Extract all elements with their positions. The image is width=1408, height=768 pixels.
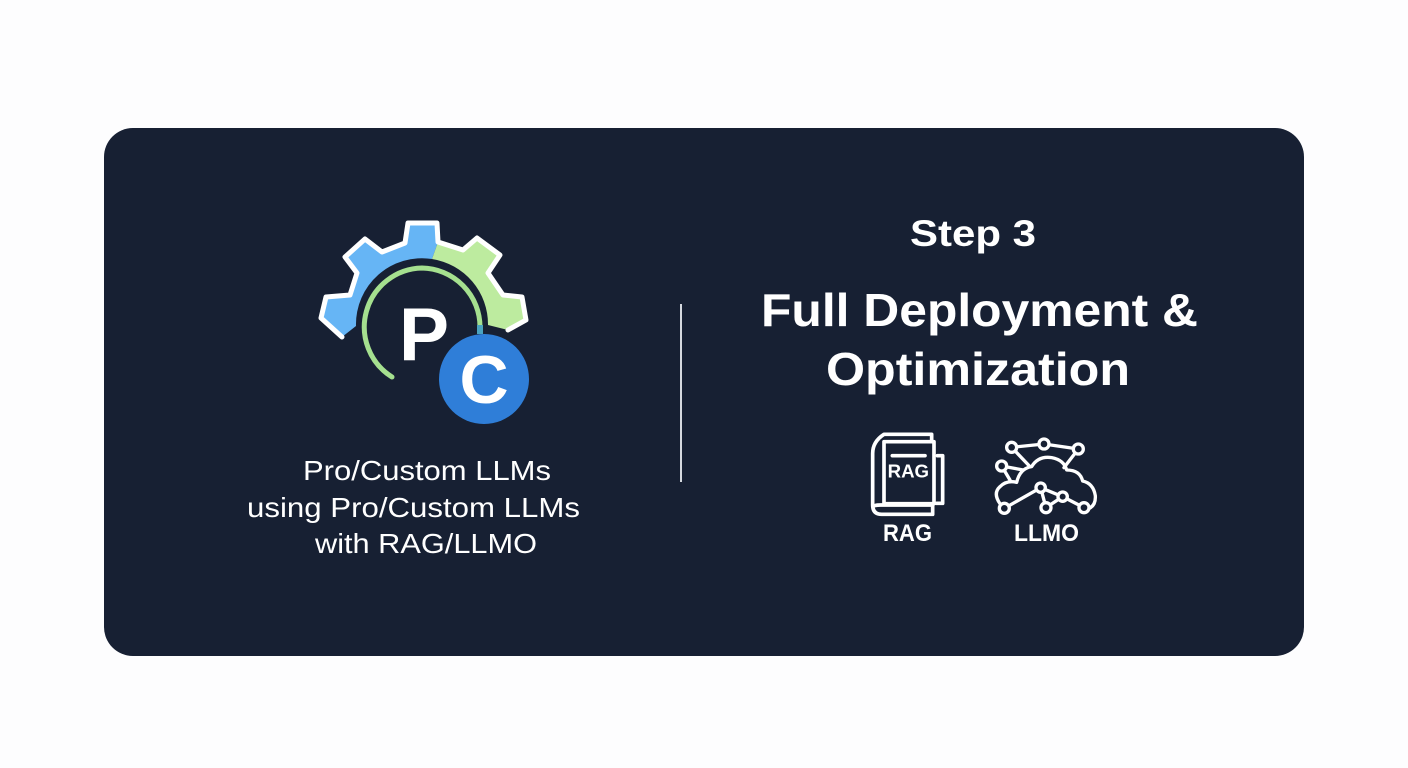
text block: description: with RAG/LLMO [314, 528, 537, 559]
ring junction [477, 325, 483, 334]
icon: gear with P and C badge [321, 223, 529, 424]
heading: step number: Step 3 [910, 213, 1036, 254]
heading: title: Full Deployment & [761, 284, 1198, 336]
progress ring [364, 268, 480, 377]
gear green half [432, 238, 526, 330]
badge C [439, 334, 529, 424]
icon: RAG book [873, 434, 943, 514]
heading: title: Optimization [826, 343, 1130, 395]
text block: description [247, 455, 580, 559]
label: LLMO: LLMO [1014, 520, 1079, 547]
badge C: C [459, 342, 509, 418]
panel: dark card [104, 128, 1304, 656]
text block: description: using Pro/Custom LLMs [247, 492, 580, 523]
icon: LLMO cloud network [996, 439, 1095, 513]
icon: RAG book: RAG [888, 460, 929, 481]
label: RAG: RAG [883, 520, 932, 547]
gear blue half [321, 223, 438, 337]
text block: description: Pro/Custom LLMs [303, 455, 551, 486]
heading: title [761, 284, 1198, 395]
gear white outline [321, 223, 526, 337]
divider [680, 304, 682, 482]
letter P: P [399, 292, 449, 376]
